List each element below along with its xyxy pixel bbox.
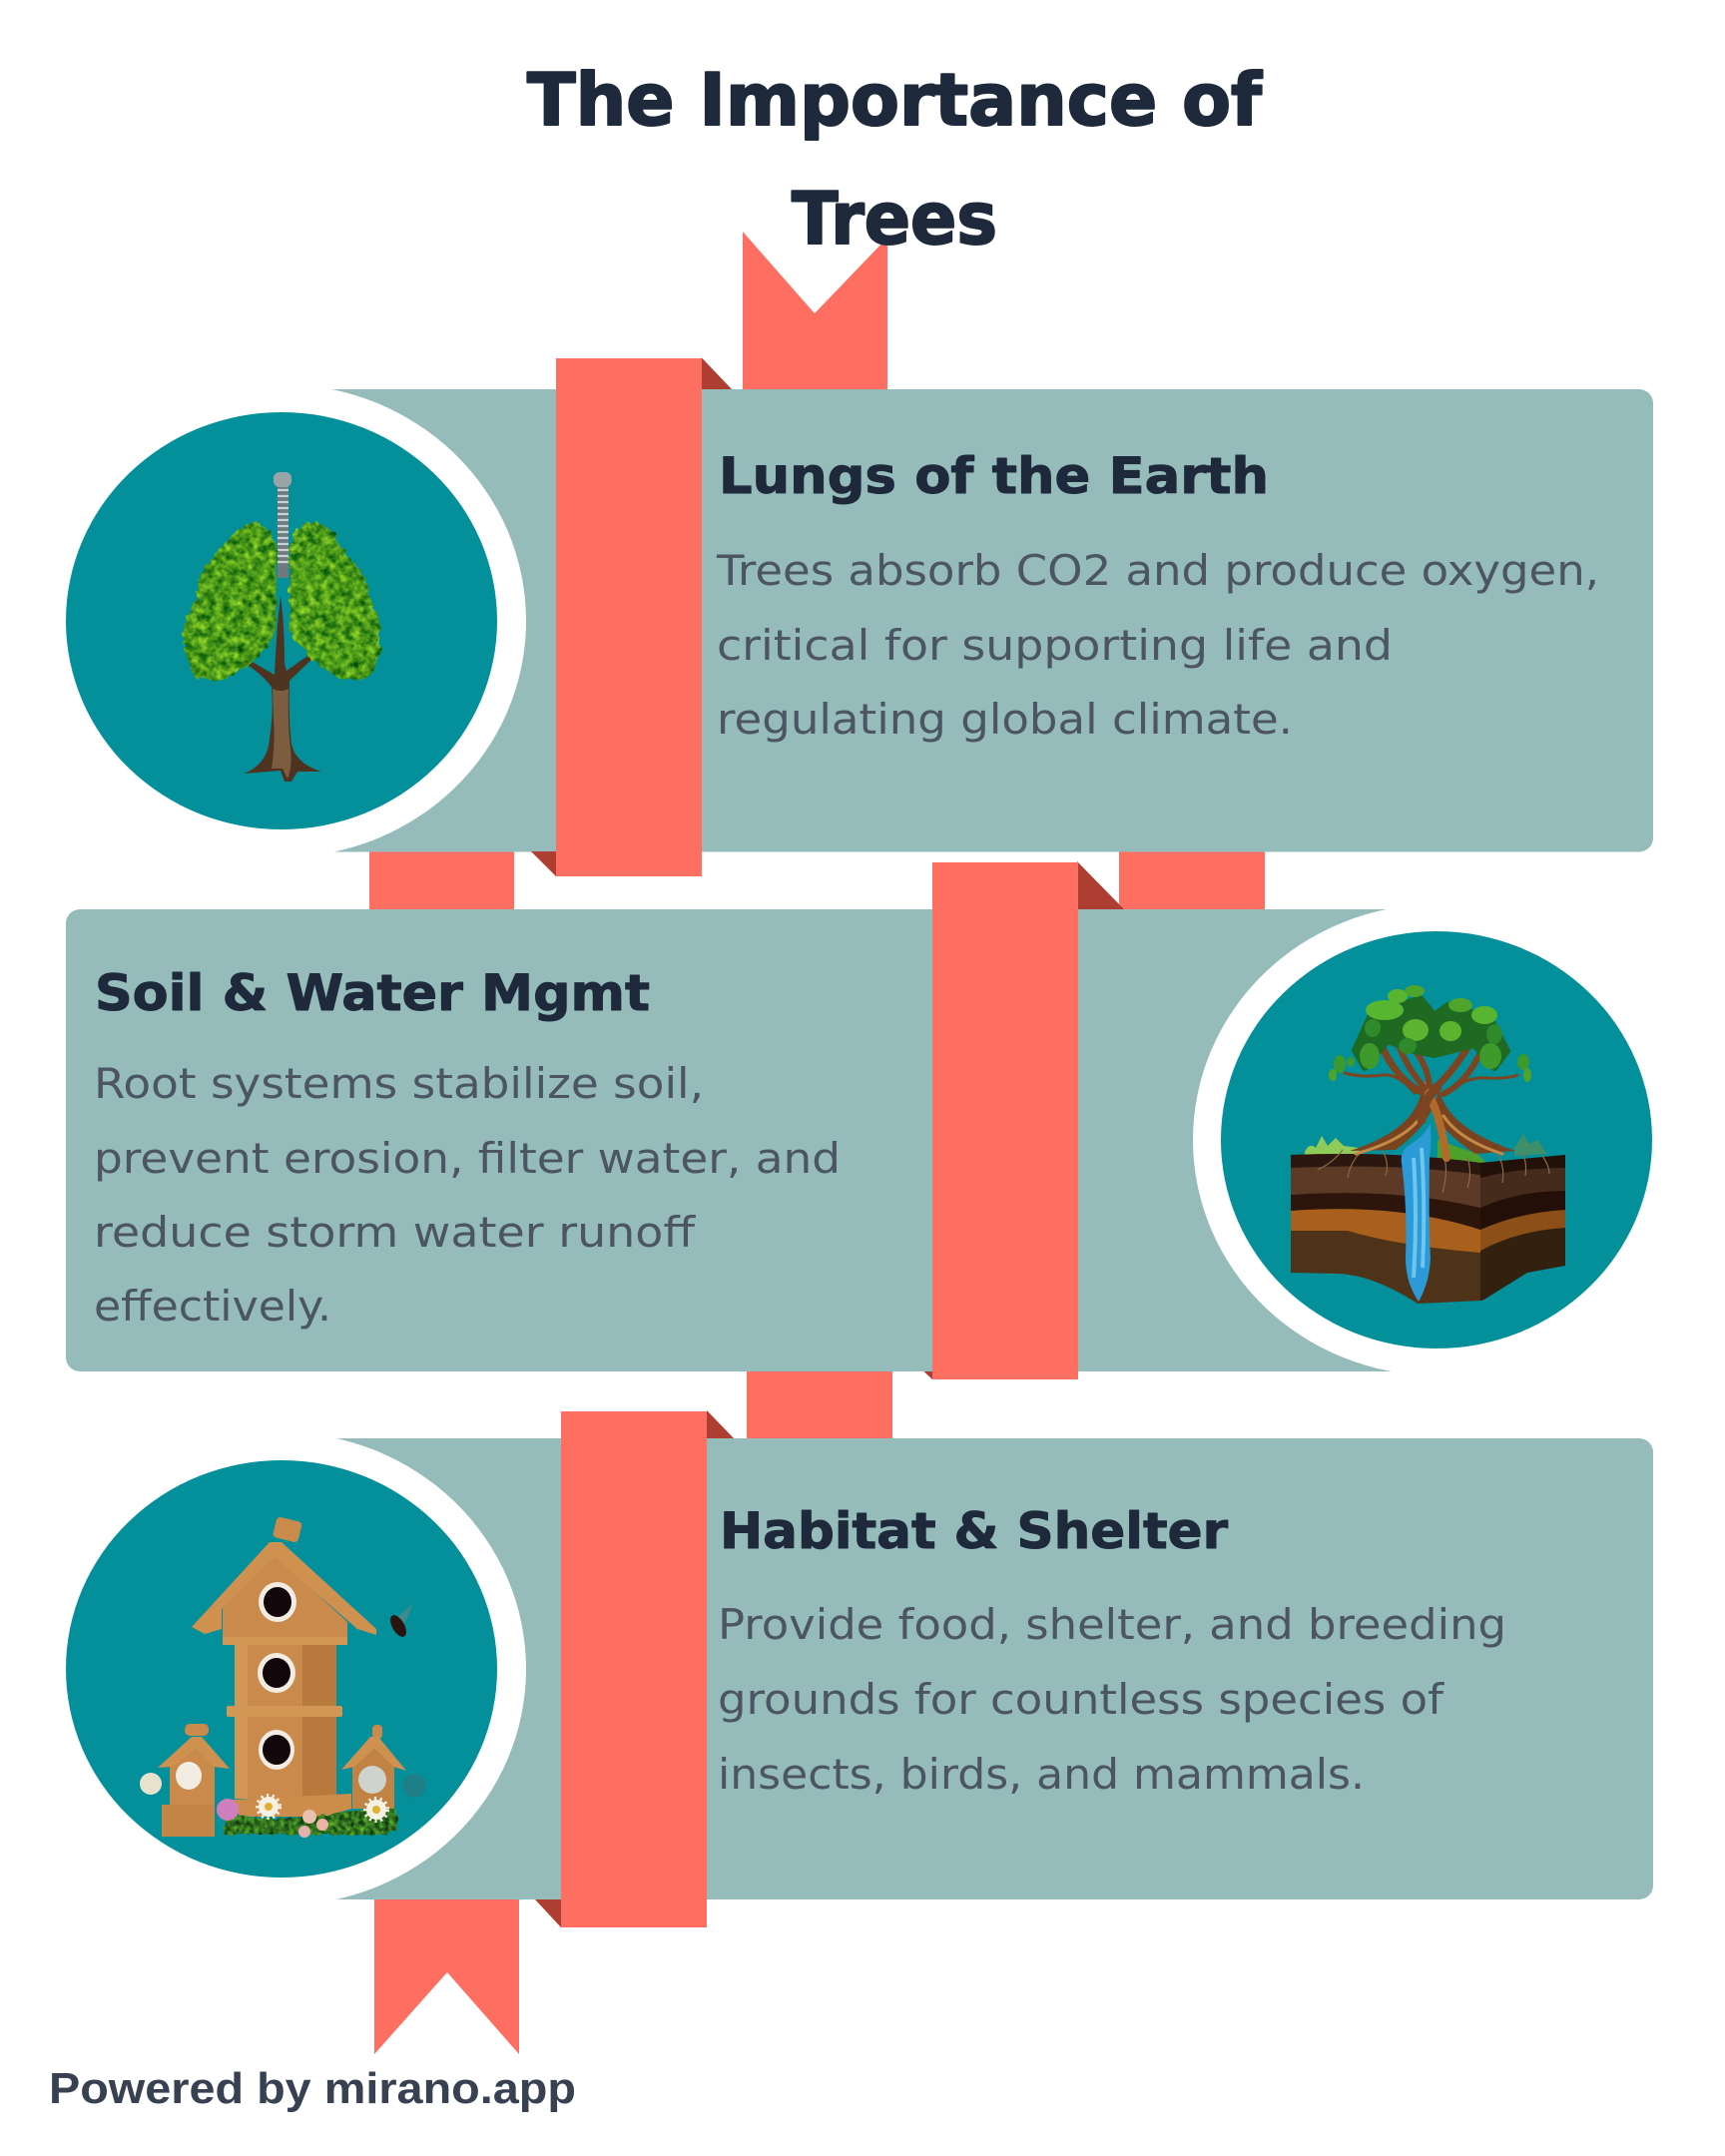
heading: lungs of the earth: Lungs of the Earth bbox=[719, 447, 1269, 505]
title: Trees bbox=[792, 177, 997, 261]
panel: lungs of the earth bbox=[37, 384, 1653, 857]
small right house bbox=[372, 1725, 382, 1739]
right face bbox=[1480, 1155, 1565, 1301]
ribbon fold: middle panel bottom bbox=[924, 1371, 932, 1379]
text block: soil description: effectively. bbox=[94, 1282, 331, 1331]
canopy bbox=[1329, 985, 1531, 1082]
left face bbox=[1291, 1154, 1480, 1304]
text block: habitat description bbox=[718, 1600, 1506, 1799]
left lung foliage bbox=[184, 522, 277, 681]
text block: soil description: Root systems stabilize soil, bbox=[94, 1059, 704, 1108]
text block: habitat description: Provide food, shelter, and breeding bbox=[718, 1600, 1506, 1649]
ribbon fold: top panel bottom bbox=[531, 851, 556, 876]
panel: habitat and shelter bbox=[37, 1432, 1653, 1905]
text block: soil description bbox=[94, 1059, 841, 1331]
ribbon fold: top panel top bbox=[701, 357, 732, 389]
ribbon front: bottom panel bbox=[561, 1411, 707, 1927]
right lung foliage bbox=[289, 522, 381, 681]
insect bbox=[387, 1603, 413, 1639]
trunk bbox=[244, 596, 321, 782]
text block: soil description: prevent erosion, filter water, and bbox=[94, 1134, 841, 1183]
text block: habitat description: grounds for countless species of bbox=[718, 1675, 1444, 1724]
text block: lungs description: Trees absorb CO2 and produce oxygen, bbox=[716, 546, 1599, 595]
text block: habitat description: insects, birds, and mammals. bbox=[718, 1750, 1365, 1799]
ribbon front: middle panel bbox=[932, 862, 1078, 1379]
entrance holes bbox=[259, 1582, 296, 1622]
icon: tree with soil layers and water bbox=[1291, 985, 1565, 1304]
text block: lungs description: regulating global climate. bbox=[717, 695, 1293, 744]
ribbon fold: middle panel top bbox=[1077, 861, 1124, 909]
ribbon front: top panel bbox=[556, 358, 702, 876]
text block: lungs description bbox=[716, 546, 1599, 744]
ribbon fold: bottom panel bottom bbox=[535, 1899, 561, 1927]
text block: soil description: reduce storm water runoff bbox=[94, 1208, 696, 1257]
ribbon fold: bottom panel top bbox=[707, 1410, 734, 1438]
heading: soil and water: Soil & Water Mgmt bbox=[95, 964, 650, 1022]
fine rootlets bbox=[1318, 1150, 1549, 1193]
footer credit: Powered by mirano.app bbox=[49, 2064, 576, 2113]
grass and flowers bbox=[224, 1810, 397, 1835]
chimney and main house bbox=[273, 1516, 302, 1543]
ribbon tabs behind panels bbox=[369, 232, 1265, 2054]
text block: lungs description: critical for supporting life and bbox=[717, 621, 1393, 670]
roots and trunk bbox=[1350, 1090, 1432, 1151]
heading: habitat and shelter: Habitat & Shelter bbox=[720, 1502, 1228, 1560]
waterfall bbox=[1402, 1124, 1431, 1302]
icon: birdhouses bbox=[140, 1516, 426, 1838]
title bbox=[527, 58, 1263, 261]
small left house bbox=[185, 1724, 209, 1736]
panel: soil and water management bbox=[66, 904, 1680, 1375]
icon: lungs tree bbox=[184, 472, 381, 782]
title: The Importance of bbox=[527, 58, 1263, 142]
